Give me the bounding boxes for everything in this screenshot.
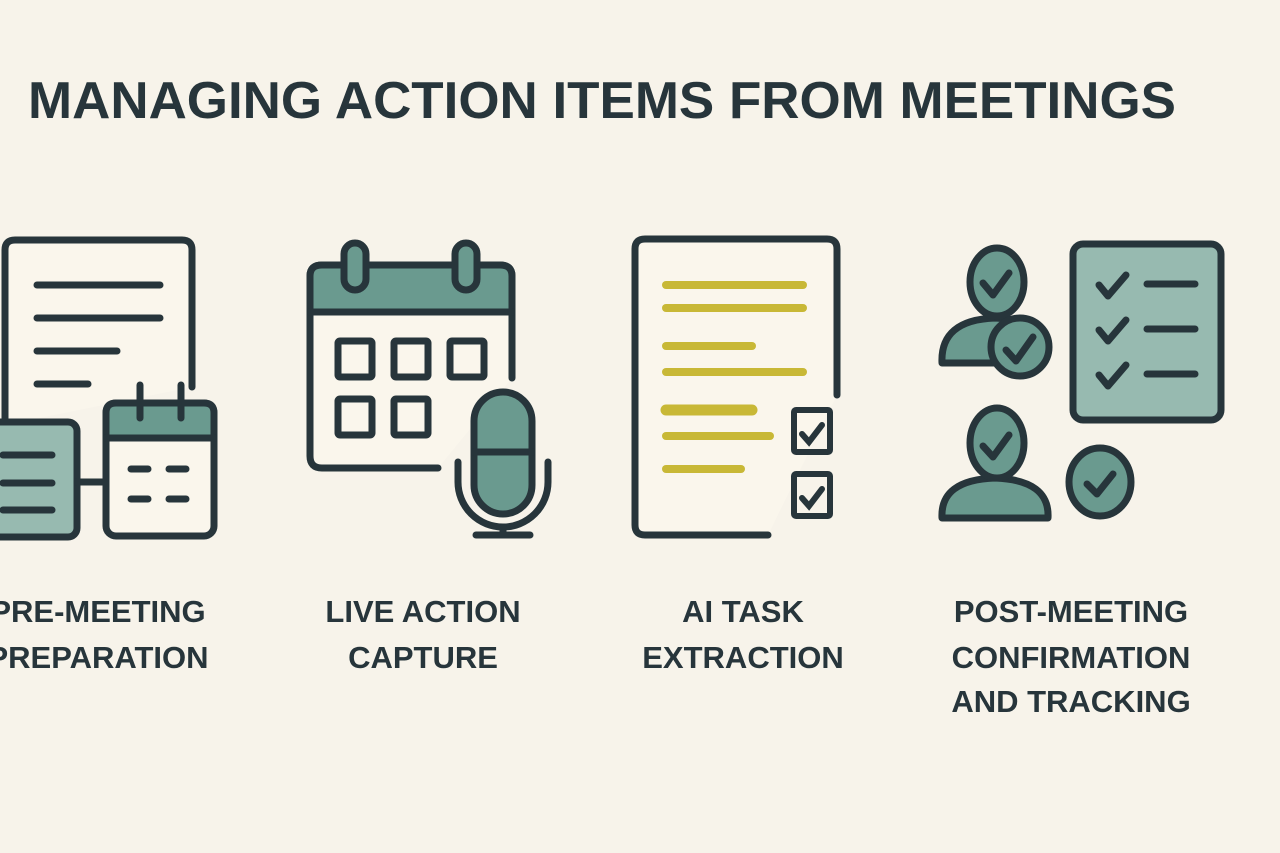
label: ai task extraction — [642, 594, 844, 675]
label: post-meeting confirmation: CONFIRMATION — [952, 640, 1190, 675]
label: post-meeting confirmation: AND TRACKING — [951, 684, 1191, 719]
label: post-meeting confirmation: POST-MEETING — [954, 594, 1188, 629]
icon: calendar with microphone — [310, 243, 548, 535]
icon: AI task extraction document — [635, 239, 837, 535]
label: pre-meeting preparation — [0, 594, 209, 675]
label: live action capture: LIVE ACTION — [325, 594, 521, 629]
title: MANAGING ACTION ITEMS FROM MEETINGS — [28, 72, 1176, 130]
label: live action capture: CAPTURE — [348, 640, 498, 675]
label: ai task extraction: AI TASK — [682, 594, 804, 629]
label: live action capture — [325, 594, 521, 675]
icon: people with checks and checklist — [942, 244, 1221, 518]
label: post-meeting confirmation — [951, 594, 1191, 719]
label: ai task extraction: EXTRACTION — [642, 640, 844, 675]
icon: pre-meeting documents and calendar — [0, 240, 214, 537]
